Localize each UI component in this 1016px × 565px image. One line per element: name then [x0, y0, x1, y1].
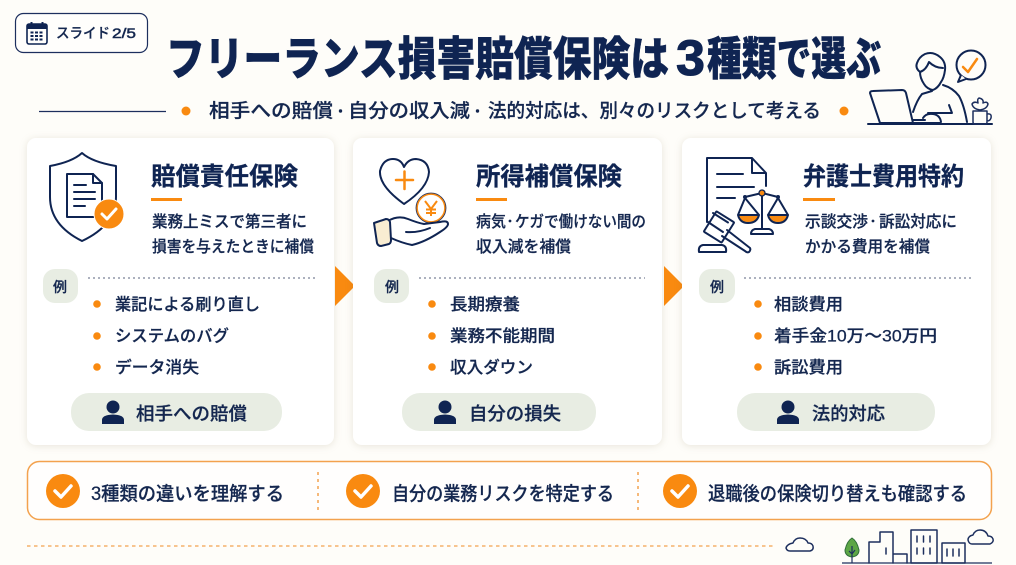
example list [93, 295, 260, 377]
panel: 弁護士費用特約: 訴訟対応に [879, 213, 957, 231]
check item 1: 3種類の違いを理解する [91, 483, 284, 505]
example list: 業記による刷り直し [115, 295, 260, 314]
subtitle: 相手への賠償 [209, 100, 333, 122]
panel: 所得補償保険: 収入減を補償 [476, 238, 571, 256]
check item 3 [663, 474, 967, 508]
slide badge [16, 14, 148, 52]
torso [913, 85, 967, 122]
checklist bar [28, 462, 992, 520]
icon: calendar [27, 22, 47, 44]
subtitle: 法的対応は、別々のリスクとして考える [488, 100, 821, 122]
panel: 賠償責任保険: 損害を与えたときに補償 [152, 238, 314, 256]
example badge: 例 [385, 279, 399, 295]
slide badge: スライド [56, 25, 110, 41]
icon: heart and yen on hand [374, 159, 448, 246]
panel: 賠償責任保険: 業務上ミスで第三者に [152, 213, 307, 231]
panel: 弁護士費用特約: 示談交渉 [805, 213, 868, 231]
example badge [699, 269, 735, 303]
laptop [870, 90, 913, 123]
example list: 着手金10万〜30万円 [774, 326, 937, 346]
check item 2 [346, 474, 614, 508]
title: フリーランス損害賠償保険は [166, 33, 669, 85]
panel: 弁護士費用特約: 弁護士費用特約 [803, 163, 964, 191]
example list: 相談費用 [774, 295, 843, 314]
arrow [335, 266, 355, 306]
panel: 所得補償保険: 病気 [476, 213, 506, 231]
example list: 収入ダウン [450, 357, 533, 377]
example list [754, 295, 937, 377]
panel: 弁護士費用特約: かかる費用を補償 [805, 238, 930, 256]
title: 3 [676, 30, 705, 86]
example badge [43, 269, 78, 303]
tag: 相手への賠償: 相手への賠償 [136, 404, 247, 424]
panel: 所得補償保険 [353, 138, 662, 445]
arrow [664, 266, 684, 306]
tag: 法的対応: 法的対応 [812, 404, 885, 424]
icon: shield with document [50, 153, 124, 241]
check item 1 [46, 474, 284, 508]
example badge [374, 269, 409, 303]
panel: 所得補償保険: 所得補償保険 [476, 163, 622, 191]
example badge: 例 [710, 279, 724, 295]
tag: 自分の損失: 自分の損失 [469, 404, 561, 424]
panel: 賠償責任保険 [27, 138, 334, 445]
icon: cloud [786, 538, 813, 551]
icon: document, scales and gavel [699, 158, 788, 252]
example list: データ消失 [115, 357, 200, 377]
panel: 所得補償保険: ケガで働けない間の [515, 213, 646, 231]
check item 2: 自分の業務リスクを特定する [392, 483, 614, 505]
panel: 弁護士費用特約 [682, 138, 991, 445]
illustration: city skyline [842, 530, 993, 563]
plant cup [973, 111, 991, 124]
speech bubble [956, 50, 986, 80]
tag: 法的対応 [737, 393, 935, 431]
panel: 賠償責任保険: 賠償責任保険 [151, 163, 298, 191]
example list [428, 295, 555, 377]
title: 種類で選ぶ [707, 33, 881, 85]
example list: 長期療養 [450, 295, 520, 314]
head [916, 53, 945, 90]
slide badge: 2/5 [112, 25, 136, 41]
tag: 相手への賠償 [71, 393, 282, 431]
check item 3: 退職後の保険切り替えも確認する [708, 483, 967, 505]
example list: 業務不能期間 [450, 326, 555, 346]
icon: person at laptop [868, 50, 992, 124]
tag: 自分の損失 [402, 393, 596, 431]
subtitle: 自分の収入減 [348, 100, 470, 122]
example list: 訴訟費用 [774, 358, 843, 377]
example list: システムのバグ [115, 326, 229, 346]
example badge: 例 [53, 279, 67, 295]
gavel [704, 211, 734, 243]
subtitle [39, 100, 848, 122]
